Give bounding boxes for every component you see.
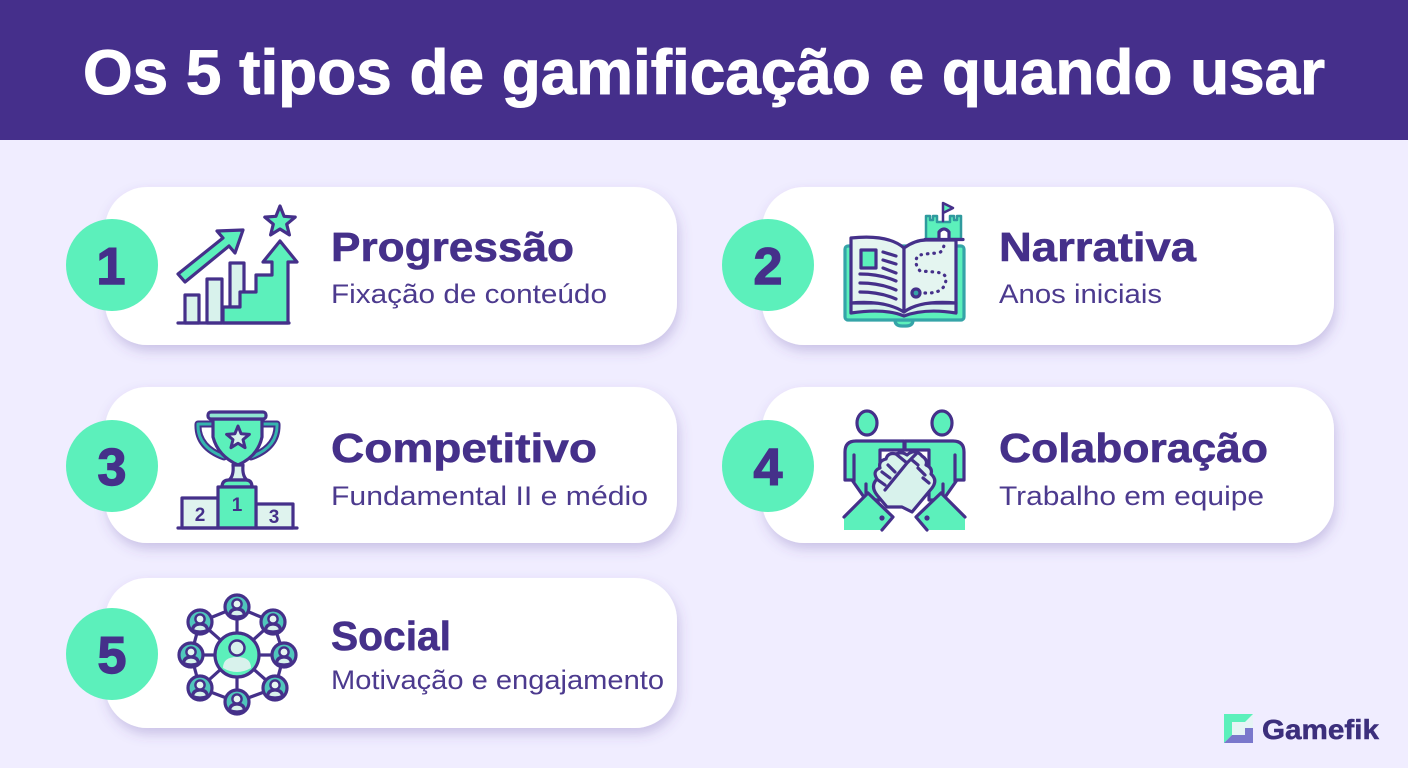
panel: Social	[66, 578, 677, 728]
icon: rising chart with star	[178, 206, 297, 323]
heading: Competitivo	[331, 425, 597, 471]
number badge 2	[722, 219, 814, 311]
heading: Narrativa	[999, 224, 1197, 270]
subtitle: Fixação de conteúdo	[331, 279, 607, 309]
subtitle: Fundamental II e médio	[331, 481, 648, 511]
number badge 1: 1	[97, 238, 125, 296]
icon: trophy on podium	[178, 412, 297, 528]
number badge 3: 3	[98, 439, 126, 497]
panel: Colaboração	[722, 387, 1334, 543]
subtitle: Trabalho em equipe	[999, 481, 1264, 511]
number badge 2: 2	[754, 238, 782, 296]
number badge 4: 4	[754, 439, 783, 497]
podium numbers: 1	[232, 495, 243, 516]
icon: two people clasping hands	[844, 411, 965, 530]
panel: Competitivo	[66, 387, 677, 543]
heading: Colaboração	[999, 425, 1268, 471]
subtitle: Motivação e engajamento	[331, 665, 664, 695]
podium numbers: 2	[195, 505, 205, 526]
header banner	[0, 0, 1408, 140]
podium numbers	[195, 495, 279, 528]
heading: Progressão	[331, 224, 574, 270]
number badge 4	[722, 420, 814, 512]
icon: open book with castle	[845, 203, 964, 326]
panel: Progressão	[66, 187, 677, 345]
number badge 5	[66, 608, 158, 700]
number badge 1	[66, 219, 158, 311]
heading: Social	[331, 613, 451, 659]
logo: Gamefik: Gamefik	[1262, 714, 1379, 745]
title: Os 5 tipos de gamificação e quando usar	[83, 38, 1325, 108]
panel: Narrativa	[722, 187, 1334, 345]
podium numbers: 3	[269, 507, 279, 528]
subtitle: Anos iniciais	[999, 279, 1162, 309]
number badge 3	[66, 420, 158, 512]
number badge 5: 5	[98, 627, 126, 685]
icon: people network	[179, 595, 296, 714]
